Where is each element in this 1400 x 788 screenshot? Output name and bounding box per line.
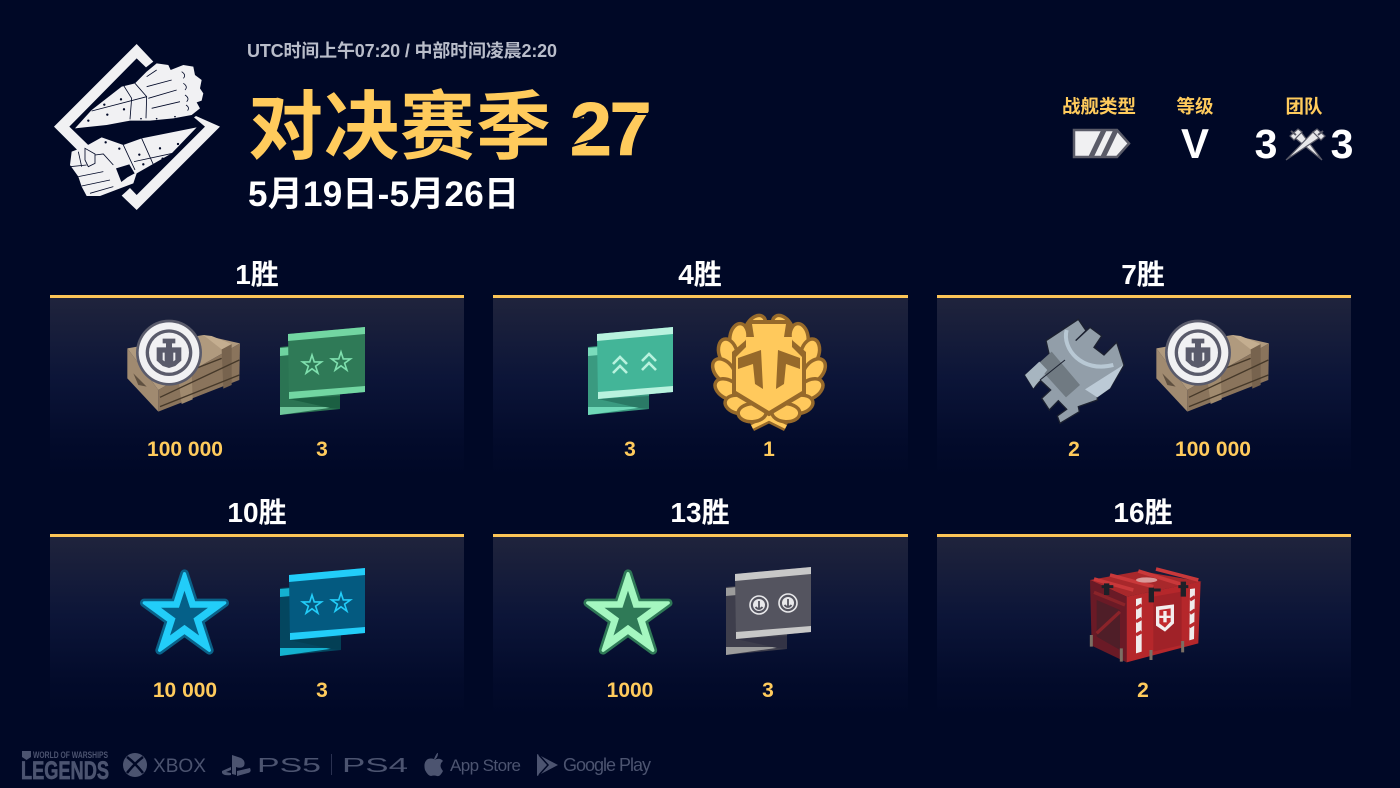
logo: Google Play: Google Play [563,755,651,775]
value: flags: 3 [624,438,636,461]
panel: 4 wins [493,259,908,477]
value: parts: 2 [1068,438,1080,461]
heading: 7 wins: 7胜 [1121,259,1165,290]
team format: 3 [1255,121,1277,167]
panel: 13 wins [493,497,908,716]
title: 27 [570,87,649,171]
date range: 5月19日-5月26日 [248,175,519,214]
panel: 1 win [50,259,464,477]
value: credits: 100 000 [147,438,223,461]
heading: 13 wins: 13胜 [670,497,730,528]
logo: PS5 [222,755,321,777]
panel: 10 wins [50,497,464,716]
panel: 7 wins [937,259,1351,477]
tier [1176,96,1214,167]
value: points: 1000 [607,679,653,702]
heading: 10 wins: 10胜 [227,497,287,528]
icon: coin crate [127,320,240,412]
logo: World of Warships Legends [21,750,109,785]
value: crates: 2 [1137,679,1149,702]
value: emblem: 1 [763,438,775,461]
icon: blue star [144,574,225,650]
icon: blue star flag [280,568,365,656]
value: flags: 3 [762,679,774,702]
title: 对决赛季 [248,66,551,175]
icon: coin crate [1156,320,1269,412]
logo: Xbox: XBOX [153,756,206,777]
icon: ship class [1074,130,1129,157]
logo: Xbox [123,753,206,777]
icon: gold laurel emblem [708,312,830,427]
value: flags: 3 [316,438,328,461]
tier: 等级 [1176,96,1214,117]
panel: 16 wins [937,497,1351,716]
logo: PS5: PS5 [257,755,321,777]
value: flags: 3 [316,679,328,702]
icon: green star [588,574,668,650]
logo: World of Warships Legends: WORLD OF WARSHIPS [33,750,108,760]
heading: 16 wins: 16胜 [1113,497,1173,528]
logo: App Store [424,753,521,776]
icon: crossed swords [1286,129,1325,160]
value: points: 10 000 [153,679,217,702]
footer: platform logos [21,750,651,785]
logo: gauntlets in diamond [54,44,220,210]
ship type: 战舰类型 [1062,96,1136,117]
logo: World of Warships Legends: LEGENDS [21,757,109,785]
value: credits: 100 000 [1175,438,1251,461]
heading: 1 win: 1胜 [235,259,279,290]
icon: grey anchor flag [726,567,811,655]
tier: V [1181,120,1209,167]
ship type [1062,96,1136,157]
icon: steel upgrade part [1025,319,1124,423]
logo: App Store: App Store [450,756,521,775]
logo: PS4: PS4 [342,755,408,777]
icon: red crate [1090,569,1202,662]
icon: green star flag [280,327,365,415]
team format: 团队 [1285,96,1323,117]
heading: 4 wins: 4胜 [678,259,722,290]
team format: 3 [1331,121,1353,167]
schedule line: UTC时间上午07:20 / 中部时间凌晨2:20 [247,40,557,61]
team format [1255,96,1353,167]
icon: teal chevron flag [588,327,673,415]
